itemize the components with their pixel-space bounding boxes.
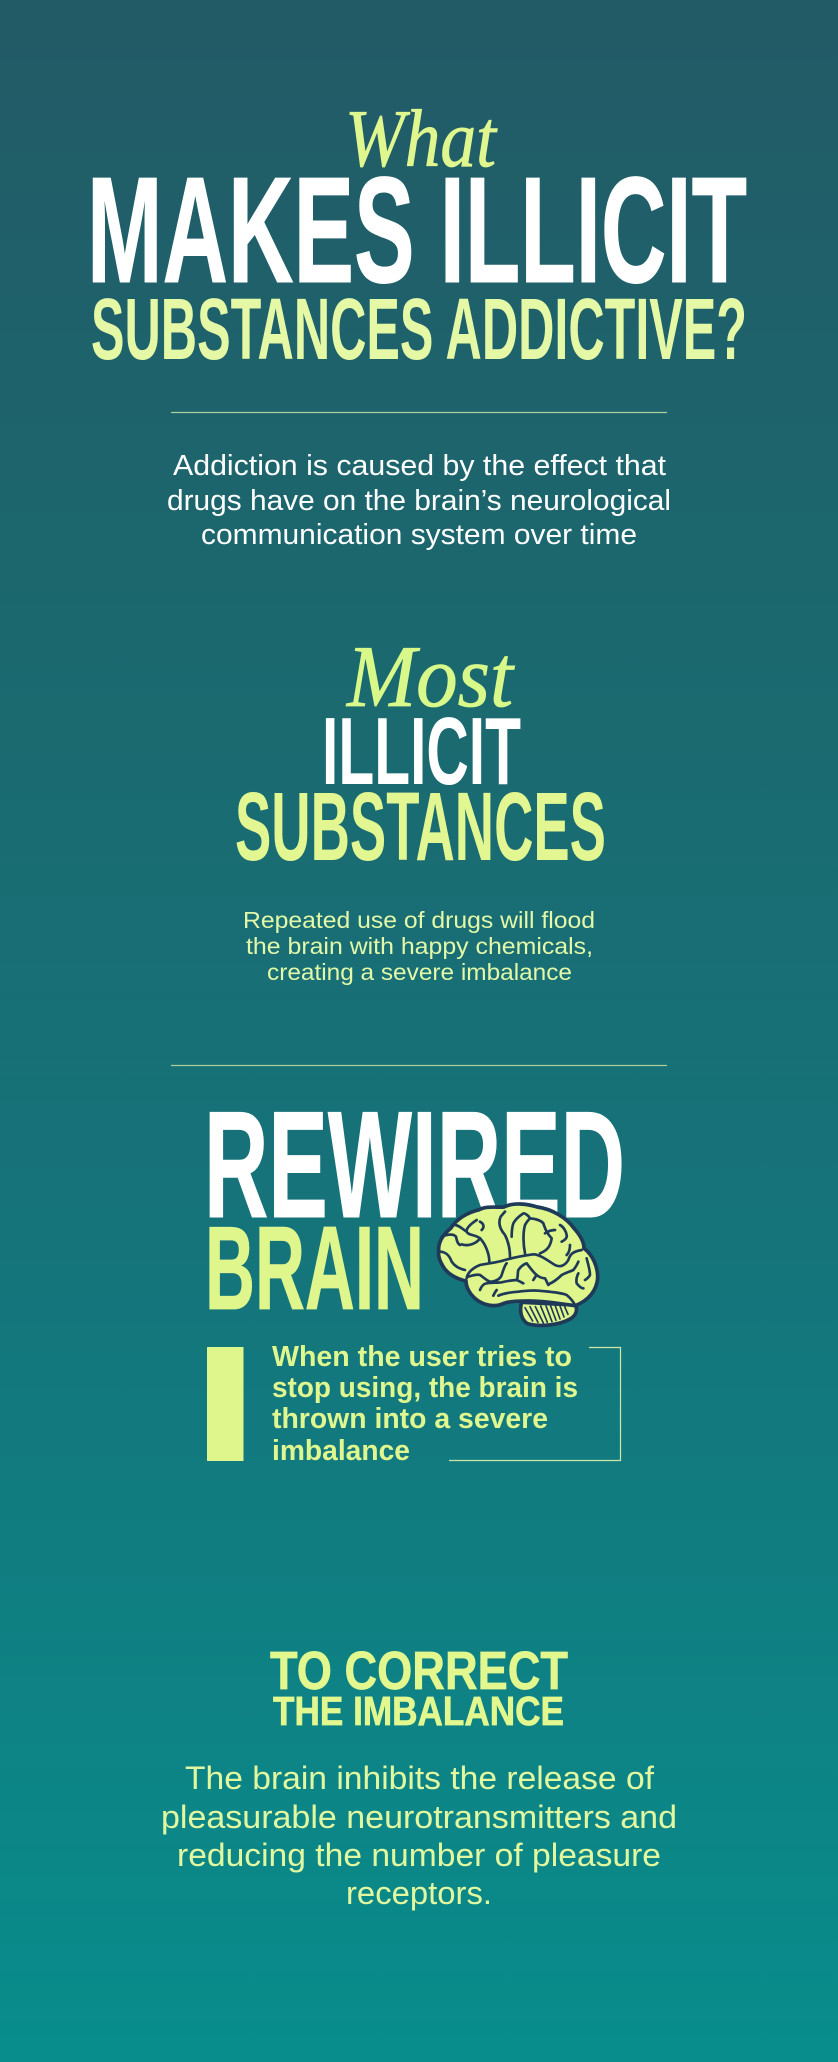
imbalance explanation text: pleasurable neurotransmitters and: [161, 1799, 677, 1835]
section heading: most illicit substances: [235, 629, 606, 881]
section heading: to correct the imbalance: [270, 1641, 568, 1734]
callout text: thrown into a severe: [272, 1403, 548, 1435]
section heading: to correct the imbalance: THE IMBALANCE: [273, 1688, 564, 1734]
callout text: stop using, the brain is: [272, 1372, 578, 1404]
intro text: drugs have on the brain’s neurological: [167, 485, 671, 517]
bracket frame: [449, 1348, 620, 1460]
imbalance explanation text: receptors.: [346, 1875, 492, 1911]
icon: brain: [439, 1204, 598, 1325]
callout: when the user tries to stop: [207, 1341, 620, 1467]
intro text: [167, 450, 671, 551]
intro text: communication system over time: [201, 519, 637, 551]
intro text: Addiction is caused by the effect that: [173, 450, 666, 482]
section heading: to correct the imbalance: TO CORRECT: [270, 1641, 568, 1701]
repeated use text: the brain with happy chemicals,: [246, 933, 593, 959]
title block: [87, 93, 747, 378]
cerebellum: [521, 1302, 576, 1325]
heading: brain: BRAIN: [205, 1202, 424, 1335]
callout text: [272, 1341, 578, 1467]
imbalance explanation text: [161, 1760, 677, 1911]
repeated use text: [243, 907, 595, 985]
cerebrum: [439, 1204, 598, 1306]
callout text: imbalance: [272, 1435, 410, 1467]
repeated use text: creating a severe imbalance: [267, 959, 572, 985]
folds: [440, 1212, 590, 1305]
accent bar: [207, 1347, 244, 1461]
imbalance explanation text: The brain inhibits the release of: [185, 1760, 654, 1796]
repeated use text: Repeated use of drugs will flood: [243, 907, 595, 933]
heading: illicit: ILLICIT: [322, 698, 521, 805]
imbalance explanation text: reducing the number of pleasure: [177, 1837, 661, 1873]
script word: Most: Most: [345, 629, 515, 726]
callout text: When the user tries to: [272, 1341, 572, 1373]
script word: What: What: [345, 93, 498, 184]
